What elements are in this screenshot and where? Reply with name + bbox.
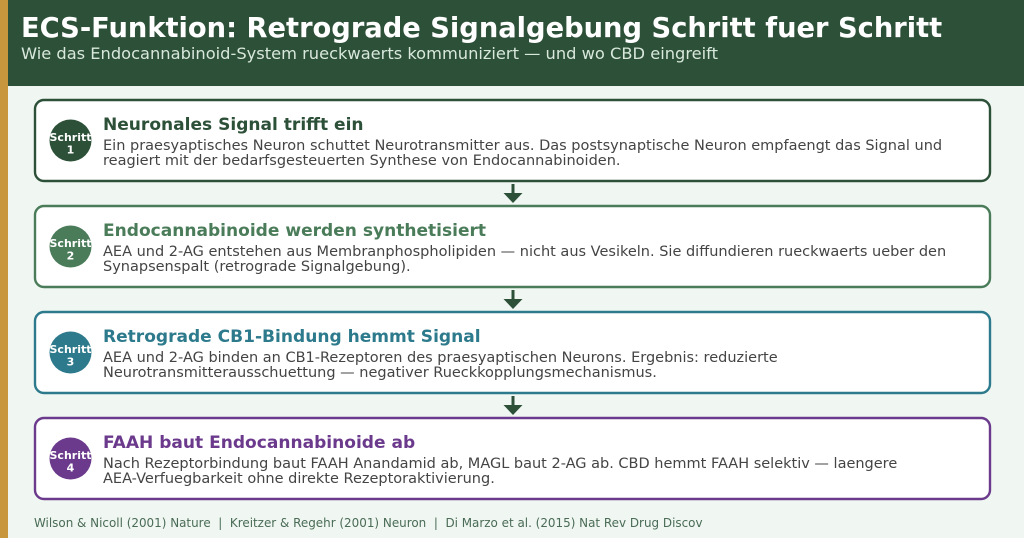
panel: step 1: [35, 100, 990, 181]
step 3 badge: 3: [67, 356, 74, 368]
arrow 3: [504, 396, 522, 415]
panel: step 2: [35, 206, 990, 287]
step 3 badge: Schritt: [50, 343, 92, 356]
step 4 badge: 4: [67, 462, 75, 474]
step 2 heading: Endocannabinoide werden synthetisiert: [103, 221, 486, 241]
step 4 heading: FAAH baut Endocannabinoide ab: [103, 433, 415, 453]
panel: step 3: [35, 312, 990, 393]
step 3 text: [103, 350, 778, 381]
step 2 badge: [50, 226, 92, 268]
step 2 text: AEA und 2-AG entstehen aus Membranphospholipiden — nicht aus Vesikeln. Sie diffundieren rueckwaerts ueber den: [103, 244, 946, 260]
step 1 badge: 1: [67, 144, 74, 156]
subtitle: Wie das Endocannabinoid-System rueckwaerts kommuniziert — und wo CBD eingreift: [21, 44, 718, 63]
step 3 badge: [50, 332, 92, 374]
arrow 1: [504, 184, 522, 203]
step 4 badge: Schritt: [50, 449, 92, 462]
step 1 text: [103, 138, 942, 169]
step 1 text: reagiert mit der bedarfsgesteuerten Synthese von Endocannabinoiden.: [103, 153, 621, 169]
step 4 text: AEA-Verfuegbarkeit ohne direkte Rezeptoraktivierung.: [103, 471, 495, 487]
step 2 badge: 2: [67, 250, 74, 262]
step 1 heading: Neuronales Signal trifft ein: [103, 115, 364, 135]
step 4 text: Nach Rezeptorbindung baut FAAH Anandamid ab, MAGL baut 2-AG ab. CBD hemmt FAAH selektiv — laengere: [103, 456, 897, 472]
step 2 badge: Schritt: [50, 237, 92, 250]
accent bar: [0, 0, 8, 538]
step 1 text: Ein praesyaptisches Neuron schuttet Neurotransmitter aus. Das postsynaptische Neuron empfaengt das Signal und: [103, 138, 942, 154]
step 1 badge: Schritt: [50, 131, 92, 144]
panel: step 4: [35, 418, 990, 499]
arrow 2: [504, 290, 522, 309]
title: ECS-Funktion: Retrograde Signalgebung Schritt fuer Schritt: [21, 13, 942, 44]
step 3 text: AEA und 2-AG binden an CB1-Rezeptoren des praesyaptischen Neurons. Ergebnis: reduzierte: [103, 350, 778, 366]
step 3 text: Neurotransmitterausschuettung — negativer Rueckkopplungsmechanismus.: [103, 365, 657, 381]
header: [8, 0, 1024, 86]
step 2 text: [103, 244, 946, 275]
footer references: Wilson & Nicoll (2001) Nature | Kreitzer & Regehr (2001) Neuron | Di Marzo et al. (2015) Nat Rev Drug Discov: [34, 516, 703, 530]
step 2 text: Synapsenspalt (retrograde Signalgebung).: [103, 259, 411, 275]
step 3 heading: Retrograde CB1-Bindung hemmt Signal: [103, 327, 481, 347]
step 4 text: [103, 456, 897, 487]
step 4 badge: [50, 438, 92, 480]
step 1 badge: [50, 120, 92, 162]
